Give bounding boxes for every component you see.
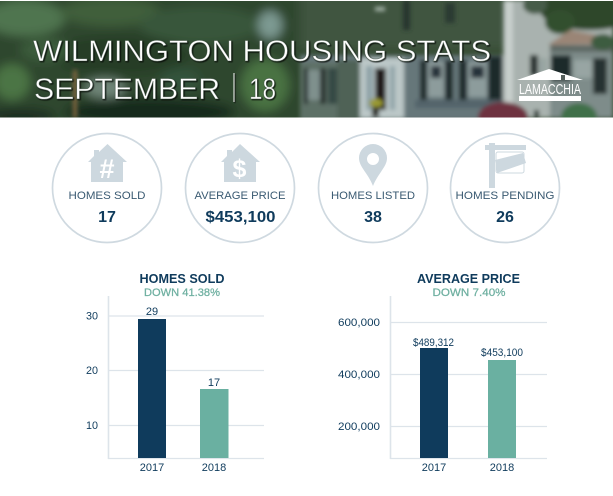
x axis labels xyxy=(422,462,514,474)
x axis labels: 2018 xyxy=(202,462,226,474)
door xyxy=(360,58,404,118)
upper right tree xyxy=(540,0,613,30)
bar values: $453,100 xyxy=(481,347,523,359)
label: HOMES LISTED xyxy=(331,190,415,202)
porch roof and wing xyxy=(548,30,613,45)
title: SEPTEMBER xyxy=(34,73,220,106)
y axis labels: 20 xyxy=(86,365,98,377)
stat: homes sold xyxy=(52,134,162,242)
x axis labels xyxy=(140,462,226,474)
bar values: 29 xyxy=(146,306,158,318)
light side wall xyxy=(503,0,613,118)
bar values xyxy=(146,306,220,389)
y axis labels: 400,000 xyxy=(338,369,380,381)
x axis labels: 2017 xyxy=(140,462,164,474)
value: $453,100 xyxy=(206,209,276,226)
header photo: blurred house and trees xyxy=(0,1,613,118)
stat: average price xyxy=(186,134,294,242)
icon: house with hash: # xyxy=(99,154,115,184)
y axis labels xyxy=(338,317,380,433)
y axis labels: 30 xyxy=(86,310,98,322)
bar 2018 xyxy=(488,360,516,458)
stat: homes pending xyxy=(450,134,560,242)
y axis labels: 200,000 xyxy=(338,421,380,433)
bar values: 17 xyxy=(208,377,220,389)
bar values xyxy=(413,337,523,359)
value: 38 xyxy=(364,209,382,226)
post in trees xyxy=(73,70,77,118)
bar 2017 xyxy=(420,348,448,458)
icon: map pin xyxy=(359,144,387,186)
title: 18 xyxy=(249,73,276,106)
icon: house with dollar: $ xyxy=(233,155,247,183)
title xyxy=(33,35,491,106)
chart title: HOMES SOLD xyxy=(140,271,224,286)
windows and shutters xyxy=(420,60,427,100)
logo: Lamacchia: LAMACCHIA xyxy=(519,81,581,98)
chart: average price xyxy=(338,271,547,474)
value: 17 xyxy=(98,209,116,226)
bar 2017 xyxy=(138,319,166,458)
label: HOMES PENDING xyxy=(456,190,554,202)
y axis labels: 10 xyxy=(86,420,98,432)
chart title: AVERAGE PRICE xyxy=(417,271,520,286)
y axis labels: 600,000 xyxy=(338,317,380,329)
value: 26 xyxy=(496,209,514,226)
title: WILMINGTON HOUSING STATS xyxy=(33,35,491,68)
label: HOMES SOLD xyxy=(68,190,146,202)
left windows xyxy=(304,68,308,104)
y axis labels xyxy=(86,310,98,432)
logo: Lamacchia xyxy=(517,69,583,101)
facade xyxy=(300,55,505,120)
x axis labels: 2018 xyxy=(490,462,514,474)
x axis labels: 2017 xyxy=(422,462,446,474)
bar 2018 xyxy=(200,389,228,458)
label: AVERAGE PRICE xyxy=(194,190,286,202)
icon: for sale sign post xyxy=(485,143,526,188)
tree trunk at front xyxy=(337,60,359,120)
chart subtitle: DOWN 7.40% xyxy=(432,287,506,299)
stat: homes listed xyxy=(318,134,428,242)
chart: homes sold xyxy=(86,271,264,474)
bar values: $489,312 xyxy=(413,337,454,349)
chart subtitle: DOWN 41.38% xyxy=(144,287,220,299)
shrubs xyxy=(476,100,530,118)
